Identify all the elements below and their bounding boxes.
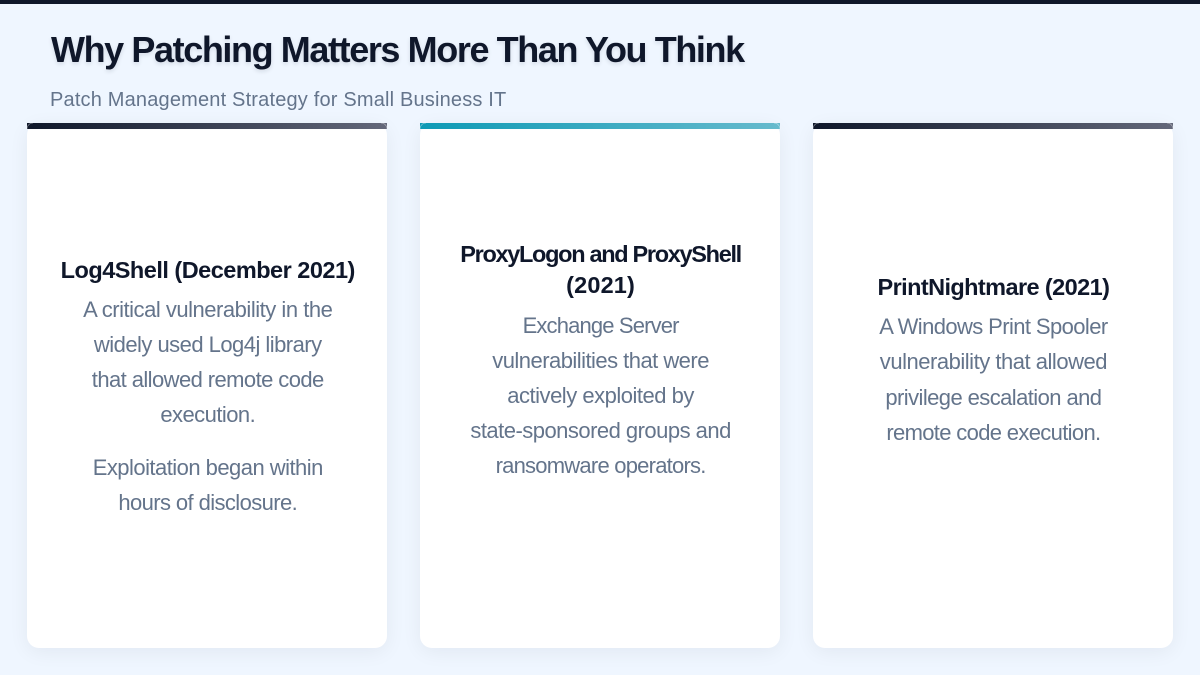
panel: Log4Shell — [27, 123, 387, 648]
body: vulnerability description — [83, 297, 332, 427]
body: Print Spooler description: A Windows Print Spooler — [879, 314, 1108, 339]
body: Print Spooler description — [879, 314, 1108, 445]
body: Print Spooler description: remote code execution. — [886, 420, 1100, 445]
body: vulnerability description: widely used Log4j library — [94, 332, 322, 357]
body: vulnerability description: A critical vulnerability in the — [83, 297, 332, 322]
title: Why Patching Matters More Than You Think — [51, 29, 744, 70]
body: Exchange Server description: ransomware operators. — [496, 453, 706, 478]
body: Exchange Server description: vulnerabilities that were — [492, 348, 709, 373]
card text: ProxyLogon and ProxyShell — [460, 241, 741, 478]
body: Exchange Server description: state-sponsored groups and — [470, 418, 731, 443]
heading: ProxyLogon and ProxyShell: ProxyLogon and ProxyShell — [460, 241, 741, 267]
top accent bar — [0, 0, 1200, 4]
card accent bar: teal — [420, 123, 780, 129]
card text: Log4Shell — [61, 257, 355, 515]
panel: ProxyLogon and ProxyShell — [420, 123, 780, 648]
panel: PrintNightmare — [813, 123, 1173, 648]
body: exploitation timing: hours of disclosure. — [118, 490, 297, 515]
heading: PrintNightmare: PrintNightmare (2021) — [878, 274, 1109, 300]
body: Exchange Server description: Exchange Server — [523, 313, 679, 338]
body: Exchange Server description — [470, 313, 731, 478]
body: Print Spooler description: privilege escalation and — [885, 385, 1101, 410]
heading: ProxyLogon and ProxyShell: (2021) — [566, 272, 635, 298]
body: vulnerability description: execution. — [160, 402, 255, 427]
body: exploitation timing — [93, 455, 323, 515]
heading: Log4Shell: Log4Shell (December 2021) — [61, 257, 355, 283]
body: Exchange Server description: actively exploited by — [507, 383, 694, 408]
card accent bar: navy — [813, 123, 1173, 129]
heading: ProxyLogon and ProxyShell — [460, 241, 741, 298]
subtitle: Patch Management Strategy for Small Business IT — [50, 89, 506, 111]
body: vulnerability description: that allowed remote code — [92, 367, 324, 392]
body: exploitation timing: Exploitation began within — [93, 455, 323, 480]
card text: PrintNightmare — [878, 274, 1109, 445]
card accent bar: navy — [27, 123, 387, 129]
body: Print Spooler description: vulnerability that allowed — [880, 349, 1107, 374]
